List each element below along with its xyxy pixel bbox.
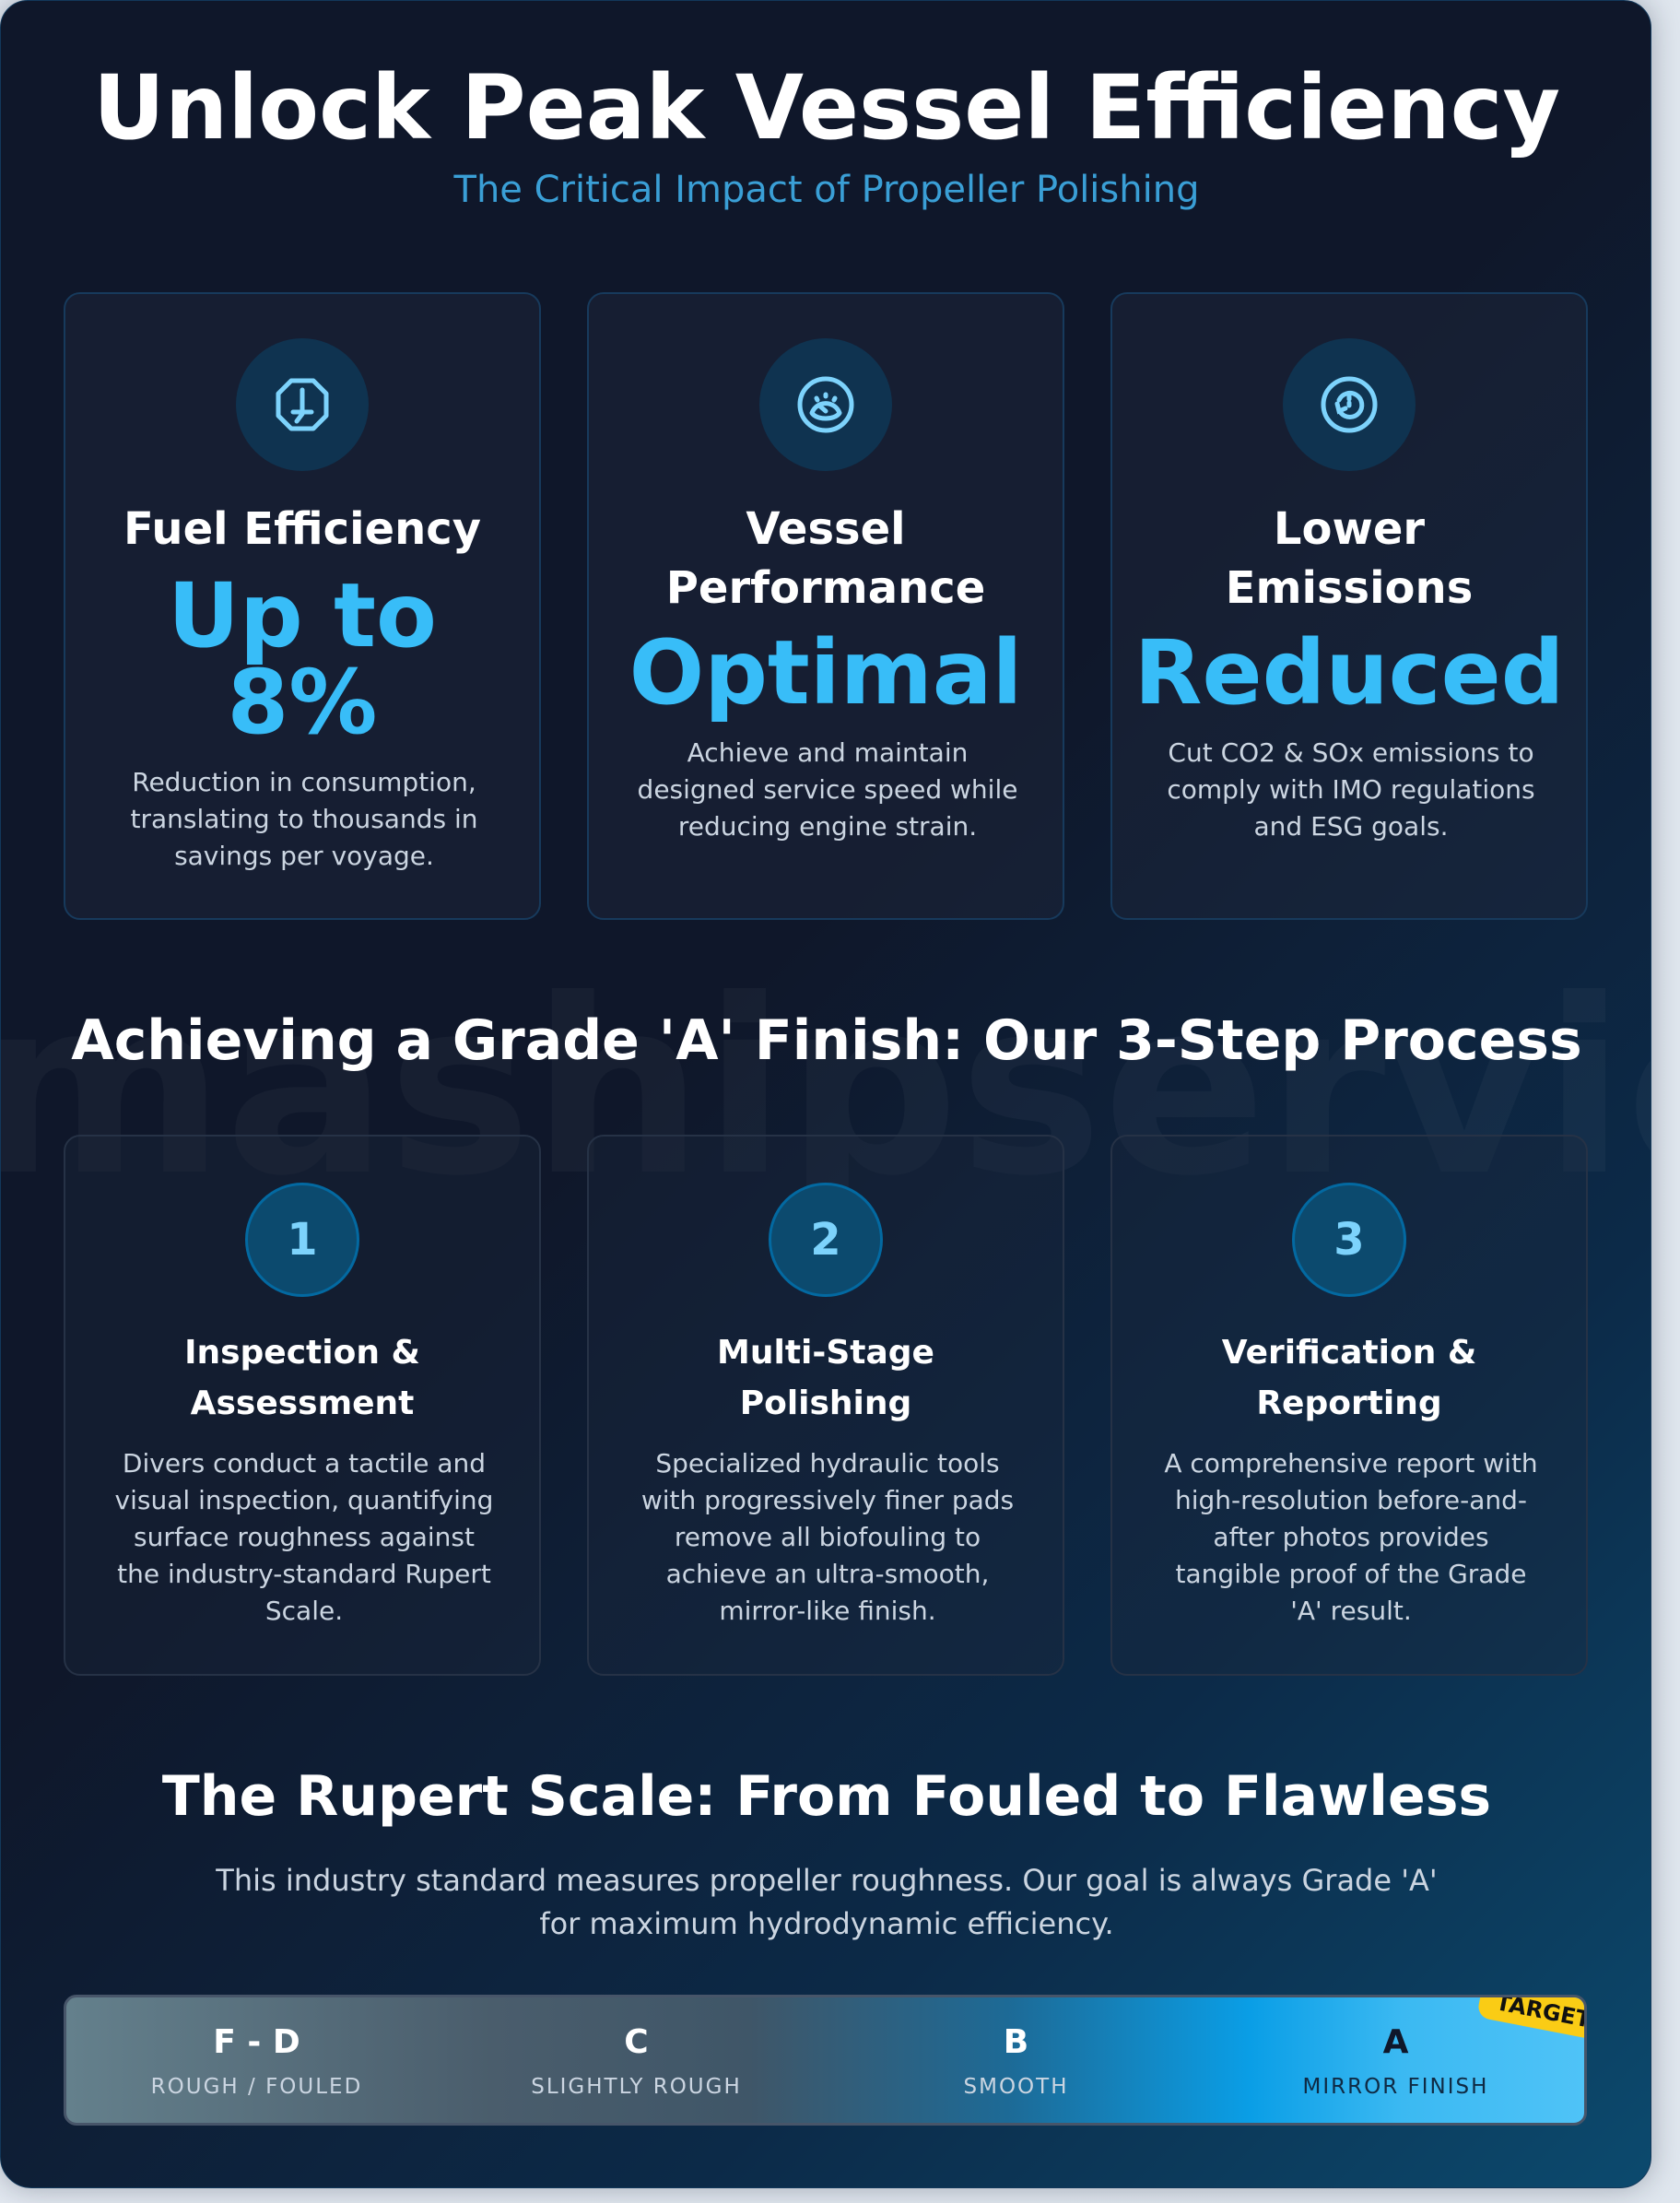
panel: fuel efficiency — [64, 292, 541, 920]
panel: step 3 — [1110, 1135, 1588, 1676]
description: Cut CO2 & SOx emissions to comply with IMO regulations and ESG goals. — [1167, 737, 1535, 842]
step description: Divers conduct a tactile and visual inspection, quantifying surface roughness against the industry-standard Rupert Scale. — [115, 1448, 493, 1626]
panel: lower emissions — [1110, 292, 1588, 920]
number badge: 3 — [1333, 1214, 1365, 1266]
icon: fuel — [236, 338, 369, 471]
subtitle: The Critical Impact of Propeller Polishing — [454, 169, 1199, 211]
heading: process: Achieving a Grade 'A' Finish: Our 3-Step Process — [71, 1008, 1582, 1073]
icon: recycle — [1283, 338, 1416, 471]
grade F-D: F - D — [213, 2023, 300, 2061]
description: Achieve and maintain designed service speed while reducing engine strain. — [638, 737, 1017, 842]
step description: Specialized hydraulic tools with progressively finer pads remove all biofouling to achieve an ultra-smooth, mirror-like finish. — [641, 1448, 1014, 1626]
step heading: Multi-Stage — [717, 1334, 934, 1372]
heading: Performance — [666, 562, 985, 614]
grade C — [531, 2023, 742, 2099]
step heading — [184, 1334, 420, 1422]
grade F-D: ROUGH / FOULED — [151, 2075, 362, 2099]
step heading: Inspection & — [184, 1334, 420, 1372]
grade C: SLIGHTLY ROUGH — [531, 2075, 742, 2099]
step heading: Reporting — [1256, 1384, 1442, 1422]
heading: rupert scale: The Rupert Scale: From Fouled to Flawless — [162, 1764, 1491, 1829]
heading: Lower — [1274, 503, 1425, 555]
grade B: SMOOTH — [964, 2075, 1069, 2099]
grade A — [1303, 2023, 1488, 2099]
step heading — [1222, 1334, 1476, 1422]
number badge — [769, 1183, 883, 1297]
grade B: B — [1004, 2023, 1028, 2061]
target tag — [1476, 1957, 1624, 2044]
grade A: MIRROR FINISH — [1303, 2075, 1488, 2099]
stat: Up to — [168, 564, 437, 667]
grade A: A — [1383, 2023, 1408, 2061]
heading: Fuel Efficiency — [123, 503, 481, 555]
heading — [1226, 503, 1473, 614]
stat: Optimal — [629, 621, 1022, 725]
heading: Vessel — [746, 503, 906, 555]
grade F-D — [151, 2023, 362, 2099]
scale bar — [64, 1995, 1587, 2126]
title: Unlock Peak Vessel Efficiency — [93, 56, 1560, 159]
panel: vessel performance — [587, 292, 1064, 920]
step heading: Verification & — [1222, 1334, 1476, 1372]
grade C: C — [624, 2023, 649, 2061]
step heading: Assessment — [191, 1384, 414, 1422]
grade B — [964, 2023, 1069, 2099]
stat: Reduced — [1134, 621, 1564, 725]
number badge — [245, 1183, 359, 1297]
icon: gauge — [759, 338, 892, 471]
stat: 8% — [227, 651, 377, 754]
heading: Emissions — [1226, 562, 1473, 614]
description: Reduction in consumption, translating to thousands in savings per voyage. — [131, 767, 477, 871]
number badge — [1292, 1183, 1406, 1297]
panel: step 1 — [64, 1135, 541, 1676]
step description: A comprehensive report with high-resolution before-and-after photos provides tangible proof of the Grade 'A' result. — [1164, 1448, 1538, 1626]
step heading — [717, 1334, 934, 1422]
heading — [666, 503, 985, 614]
number badge: 1 — [287, 1214, 318, 1266]
stat — [168, 564, 437, 754]
panel: step 2 — [587, 1135, 1064, 1676]
intro text: This industry standard measures propeller roughness. Our goal is always Grade 'A' for maximum hydrodynamic efficiency. — [216, 1863, 1438, 1941]
step heading: Polishing — [740, 1384, 911, 1422]
number badge: 2 — [810, 1214, 841, 1266]
